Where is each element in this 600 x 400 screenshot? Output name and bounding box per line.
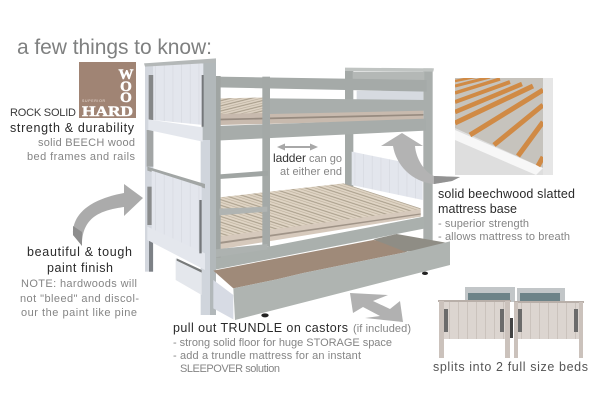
text: paint finish	[20, 245, 139, 319]
text: ladder note: can go	[309, 153, 342, 165]
title: a few things to know:	[17, 36, 212, 59]
text: slatted base: - superior strength	[438, 218, 529, 230]
text: slatted base	[438, 187, 575, 243]
text: paint finish: our the paint like pine	[21, 307, 137, 319]
ladder	[215, 76, 270, 258]
text: rock solid strength: ROCK SOLID	[10, 107, 76, 119]
text: ladder note: at either end	[280, 166, 342, 178]
lower rail	[213, 217, 424, 270]
text: trundle: (if included)	[353, 323, 411, 335]
upper rails	[216, 77, 427, 141]
text: splits caption: splits into 2 full size beds	[433, 360, 588, 374]
badge: superior hard wood: HARD	[82, 104, 133, 120]
text: slatted base: mattress base	[438, 202, 517, 216]
back end frame	[345, 68, 434, 242]
trundle drawer	[176, 234, 450, 320]
illustration: bunk bed	[144, 58, 450, 320]
text: trundle: - add a trundle mattress for an instant	[173, 350, 361, 362]
text: paint finish: beautiful & tough	[27, 245, 132, 259]
text: slatted base: solid beechwood slatted	[438, 187, 575, 201]
upper mattress	[220, 97, 423, 125]
text: trundle: pull out TRUNDLE on castors	[173, 321, 348, 335]
badge: superior hard wood: O	[120, 79, 132, 95]
badge: superior hard wood: O	[120, 90, 132, 106]
text: paint finish: NOTE: hardwoods will	[21, 278, 137, 290]
arrow: up to slats	[381, 133, 460, 184]
left end frame	[144, 58, 216, 315]
arrow: curved to paint finish	[73, 184, 143, 246]
text: paint finish: paint finish	[47, 261, 113, 275]
text: ladder note: ladder	[273, 151, 306, 165]
text: trundle	[173, 321, 411, 375]
badge: superior hard wood: W	[118, 67, 134, 83]
badge: superior hard wood	[79, 62, 136, 120]
badge: superior hard wood: SUPERIOR	[82, 99, 105, 103]
lower mattress	[219, 183, 421, 249]
illustration: split beds	[438, 287, 584, 358]
text: rock solid strength	[10, 107, 136, 163]
arrow: ladder either end	[277, 144, 318, 150]
text: paint finish: not "bleed" and discol-	[20, 293, 139, 305]
photo: slatted base	[455, 76, 553, 175]
text: rock solid strength: strength & durability	[10, 121, 135, 135]
text: ladder note	[273, 151, 342, 178]
text: rock solid strength: bed frames and rails	[27, 151, 136, 163]
text: slatted base: - allows mattress to breath	[438, 231, 570, 243]
text: rock solid strength: solid BEECH wood	[38, 137, 135, 149]
text: trundle: - strong solid floor for huge STORAGE space	[173, 337, 392, 349]
text: trundle: SLEEPOVER solution	[180, 363, 280, 375]
arrow: double pull out	[350, 293, 403, 322]
